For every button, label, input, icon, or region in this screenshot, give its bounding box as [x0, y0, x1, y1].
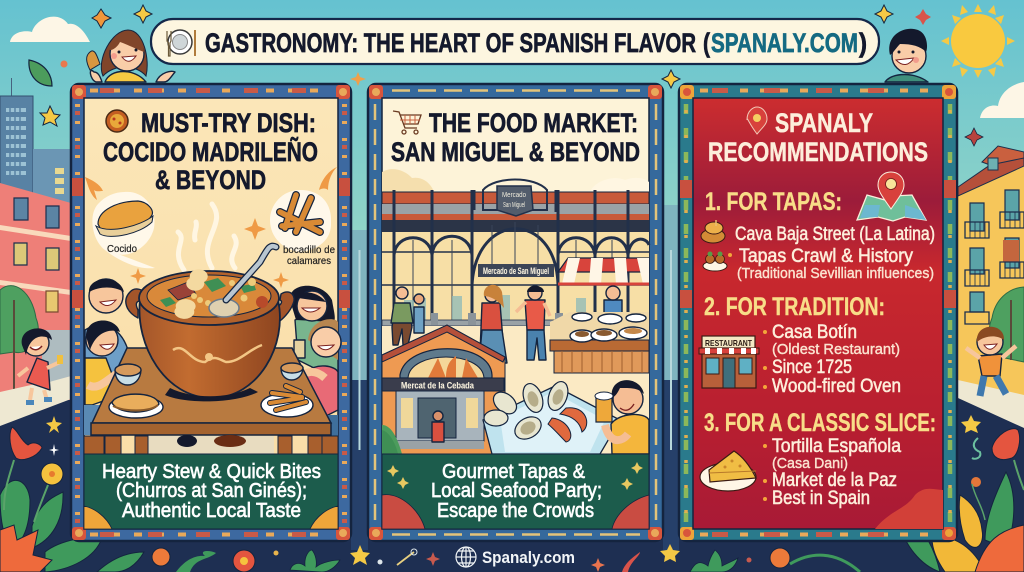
mercat de la cebada building — [382, 325, 505, 454]
list: for tradition: Casa Botín — [772, 322, 857, 343]
plate: sandwich — [109, 394, 163, 418]
list: for a classic slice: Best in Spain — [772, 488, 870, 509]
list: for a classic slice: (Casa Dani) — [772, 455, 848, 472]
table — [84, 348, 338, 454]
bottom floral strip — [152, 544, 860, 572]
heading: must-try dish — [103, 108, 318, 195]
caption text: (Churros at San Ginés); — [116, 480, 307, 502]
sunflower corners — [84, 506, 338, 529]
list: for tapas — [728, 224, 935, 282]
caption text: Gourmet Tapas & — [442, 461, 586, 483]
list: for tapas: Tapas Crawl & History — [739, 246, 913, 267]
list: for tapas: Cava Baja Street (La Latina) — [735, 224, 935, 245]
right tree — [989, 287, 1024, 362]
caption ornaments — [382, 462, 649, 529]
panel frame — [679, 84, 957, 541]
panel background — [382, 98, 649, 529]
section: for tapas — [701, 172, 935, 282]
grey doorway — [42, 330, 71, 384]
decorative orange flames — [85, 167, 337, 200]
panel: must-try dish — [71, 84, 351, 541]
icon: location pin — [747, 107, 767, 134]
caption band — [84, 454, 338, 529]
title url: SPANALY.COM — [711, 28, 858, 58]
footer: website — [456, 547, 575, 567]
section: for a classic slice — [700, 409, 936, 509]
gutter light strips — [351, 205, 679, 550]
steam — [178, 204, 236, 270]
section heading: 3. FOR A CLASSIC SLICE: — [704, 409, 936, 437]
label: bocadillo de calamares — [283, 244, 335, 267]
section heading: 1. FOR TAPAS: — [705, 188, 842, 216]
people at table, left — [84, 279, 128, 435]
man with beer — [595, 380, 649, 454]
market building — [382, 169, 649, 454]
heading: food market — [391, 108, 640, 167]
icon: paella pan — [106, 110, 128, 132]
heading: recommendations — [708, 108, 928, 167]
title opening bracket: ( — [703, 28, 710, 58]
list: for tradition: (Oldest Restaurant) — [772, 341, 900, 358]
plate: churros — [261, 386, 313, 417]
icon: star — [40, 106, 60, 126]
panel background — [84, 98, 338, 529]
list: for tradition: Wood-fired Oven — [772, 376, 901, 397]
section: for tradition — [699, 293, 901, 397]
background: navy ground — [0, 380, 1024, 572]
market gate sign — [474, 180, 556, 216]
caption text: Authentic Local Taste — [122, 500, 301, 522]
icon: leaf — [29, 60, 52, 86]
icon: plate and cutlery — [167, 30, 195, 56]
panel frame — [368, 84, 663, 541]
market gate sign: Mercado — [502, 190, 526, 199]
food stall — [550, 258, 649, 373]
bubble: cocido sandwich — [92, 192, 155, 268]
boy peeking top right — [885, 29, 928, 82]
icon: tapas bite — [701, 220, 725, 243]
footer url: Spanaly.com — [482, 548, 575, 567]
right floral decoration — [900, 415, 1024, 572]
sign: mercado de san miguel: Mercado de San Miguel — [483, 266, 549, 276]
caption text — [431, 461, 602, 522]
label: bocadillo de calamares: bocadillo de — [283, 244, 335, 256]
heading: must-try dish: COCIDO MADRILEÑO — [103, 136, 318, 167]
label: bocadillo de calamares: calamares — [287, 255, 331, 267]
sparkle stars top left — [60, 5, 983, 146]
cloud left — [10, 17, 90, 42]
decorative darker wave — [875, 489, 943, 529]
girl waving — [18, 328, 63, 405]
right yellow building — [958, 146, 1024, 395]
caption text: Escape the Crowds — [437, 500, 594, 522]
icon: globe — [456, 547, 476, 567]
heading: food market: THE FOOD MARKET: — [429, 108, 638, 138]
list: for a classic slice: Market de la Paz — [772, 470, 897, 491]
caption band — [382, 454, 649, 529]
woman peeking with churro, top left — [87, 30, 175, 82]
people at table, right — [290, 286, 341, 440]
panel: spanaly recommendations — [679, 84, 957, 541]
list: for a classic slice: Tortilla Española — [772, 436, 901, 457]
bubble: calamares churros — [270, 190, 335, 267]
title banner — [151, 19, 879, 64]
heading: must-try dish: & BEYOND — [155, 165, 266, 195]
title closing bracket: ) — [859, 28, 867, 58]
ladle — [226, 246, 276, 300]
heading: food market: SAN MIGUEL & BEYOND — [391, 137, 640, 167]
icon: tortilla slice — [700, 451, 756, 491]
list: for tradition — [763, 322, 901, 397]
left tree — [0, 286, 38, 390]
market visitors — [391, 285, 550, 372]
heading: recommendations: RECOMMENDATIONS — [708, 137, 928, 167]
cloud right — [980, 82, 1024, 118]
panel frame — [71, 84, 351, 541]
label: cocido: Cocido — [107, 243, 137, 255]
title text: GASTRONOMY: THE HEART OF SPANISH FLAVOR — [205, 28, 696, 58]
boy waving — [966, 327, 1016, 396]
icon: restaurant — [699, 336, 759, 388]
sun — [941, 4, 1015, 78]
icon: restaurant: RESTAURANT — [705, 338, 753, 348]
icon: tapas plate — [703, 252, 727, 271]
heading: must-try dish: MUST-TRY DISH: — [141, 108, 316, 138]
background: sky — [0, 0, 1024, 400]
section heading: 2. FOR TRADITION: — [704, 293, 885, 321]
cooking pot — [126, 269, 294, 401]
panel background — [693, 98, 943, 529]
caption text — [102, 461, 321, 522]
caption text: Hearty Stew & Quick Bites — [102, 461, 321, 483]
list: for tradition: Since 1725 — [772, 357, 852, 378]
panel: food market — [368, 84, 663, 541]
market gate sign: San Miguel — [503, 200, 525, 209]
left buildings — [0, 78, 71, 400]
sign: mercat de la cebada: Mercat de la Cebada — [401, 380, 475, 390]
caption text: Local Seafood Party; — [431, 480, 602, 502]
list: for a classic slice — [763, 436, 901, 509]
left floral decoration — [0, 416, 144, 572]
icon: map with pin — [857, 172, 926, 221]
bowls on table — [115, 363, 303, 385]
left pavement — [0, 376, 71, 426]
right pavement — [958, 380, 1024, 428]
seafood platter — [483, 379, 620, 454]
list: for tapas: (Traditional Sevillian influences) — [737, 265, 934, 282]
icon: shopping cart — [393, 111, 421, 134]
heading: recommendations: SPANALY — [775, 108, 873, 138]
sparkles in panel 1 — [130, 218, 289, 288]
